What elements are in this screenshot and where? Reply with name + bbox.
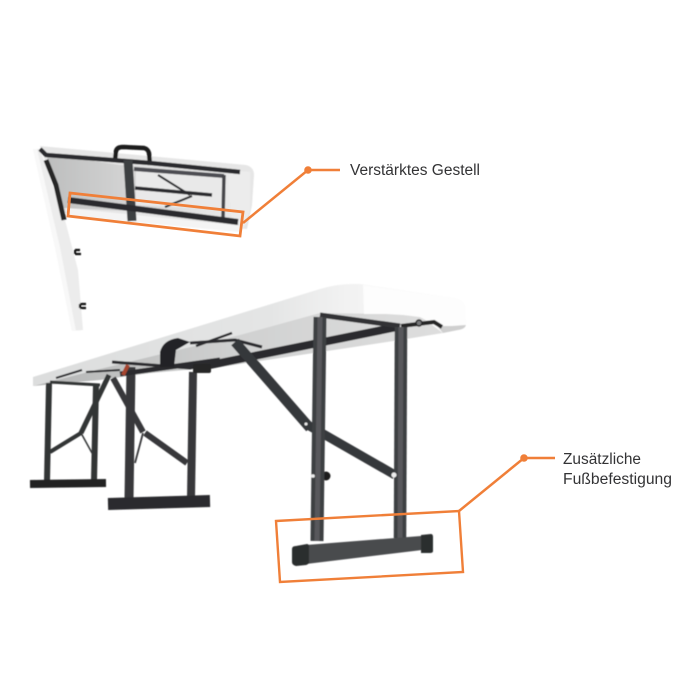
bench: middle legs: [108, 367, 210, 504]
label: reinforced frame: Verstärktes Gestell: [350, 162, 480, 179]
label: foot attachment: [563, 451, 672, 488]
bench: strap: [160, 338, 190, 367]
folded table: clips: [75, 250, 86, 308]
bench: brace: [235, 342, 396, 478]
bench: front legs: [311, 315, 442, 541]
bench: front foot: [292, 534, 433, 566]
bench: rails and strap: [56, 327, 397, 378]
callout line: foot attachment: [459, 454, 555, 511]
label: foot attachment: Zusätzliche: [563, 451, 641, 468]
folded table: underside panel: [40, 146, 254, 229]
bench: underside: [33, 310, 443, 386]
folded table: [33, 146, 254, 331]
bench: hinge: [193, 364, 211, 373]
orange highlight: foot attachment: [276, 511, 463, 582]
folded table: carry handle: [115, 147, 150, 165]
callout line: reinforced frame: [243, 166, 340, 223]
folded table: frame: [40, 149, 240, 222]
bench: far legs: [30, 375, 109, 484]
label: foot attachment: Fußbefestigung: [563, 471, 672, 488]
orange highlight: reinforced frame: [68, 193, 243, 236]
bench: top surface: [33, 284, 466, 386]
bench table: [30, 284, 466, 566]
bench: red clasp: [123, 365, 128, 375]
folded table: side panel: [33, 149, 83, 331]
